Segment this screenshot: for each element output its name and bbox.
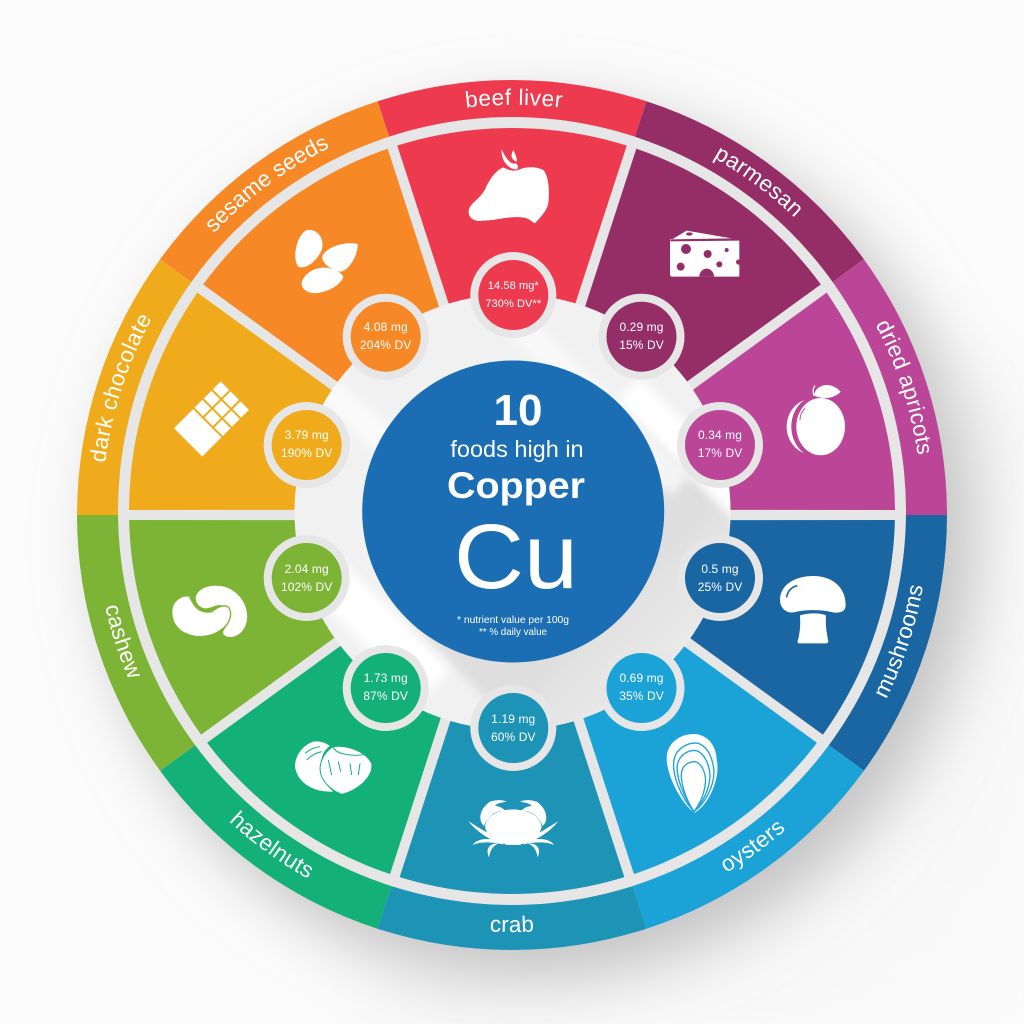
value: sesame seeds: 4.08 mg — [364, 320, 408, 334]
footnotes — [457, 614, 569, 638]
value: hazelnuts — [343, 645, 429, 731]
title number: 10 — [494, 386, 542, 435]
wedge: mushrooms — [690, 520, 895, 735]
band: sesame seeds — [148, 84, 414, 309]
wedge: dark chocolate — [129, 292, 332, 510]
value: beef liver — [470, 252, 556, 338]
value: parmesan — [598, 294, 684, 380]
label: crab: crab — [490, 916, 533, 932]
icon: mushroom — [780, 576, 846, 643]
value: crab: 60% DV — [491, 730, 536, 744]
value: cashew: 102% DV — [281, 580, 332, 594]
value: dried apricots — [677, 402, 763, 488]
wedge: hazelnuts — [207, 646, 441, 874]
value: dried apricots: 17% DV — [698, 446, 742, 460]
inner disc with long shadows — [294, 298, 730, 726]
band: parmesan — [610, 84, 876, 309]
soft shadow of wheel — [100, 104, 972, 976]
band: mushrooms — [805, 496, 967, 777]
band: oysters — [610, 721, 876, 946]
ring base — [118, 117, 906, 905]
long shadow of wheel — [204, 207, 1024, 1024]
icon: crab — [468, 800, 558, 857]
value: beef liver: 730% DV** — [485, 298, 542, 310]
footnotes: ** % daily value — [479, 626, 547, 638]
wedge: beef liver — [397, 128, 627, 304]
panel: outer band sectors — [57, 80, 967, 950]
title element name: Copper — [447, 465, 585, 506]
label: dark chocolate: dark chocolate — [90, 315, 150, 462]
label: oysters: oysters — [722, 822, 784, 871]
value: dark chocolate — [264, 402, 350, 488]
band: crab — [378, 867, 646, 950]
value: hazelnuts: 1.73 mg — [364, 671, 408, 685]
wedge: oysters — [583, 646, 817, 874]
label: mushrooms: mushrooms — [876, 585, 922, 698]
value: crab: 1.19 mg — [491, 712, 535, 726]
icon: sesame seeds — [295, 230, 358, 293]
band: dried apricots — [805, 253, 967, 534]
icon: cow — [469, 149, 549, 223]
centre circle: title — [362, 360, 664, 662]
value: parmesan: 0.29 mg — [619, 320, 664, 334]
value: cashew — [264, 535, 350, 621]
footnotes: * nutrient value per 100g — [457, 614, 569, 626]
value: mushrooms: 25% DV — [698, 580, 742, 594]
wedge: dried apricots — [693, 292, 895, 510]
value: oysters: 0.69 mg — [619, 671, 664, 685]
value: mushrooms: 0.5 mg — [701, 562, 739, 576]
value: beef liver: 14.58 mg* — [488, 280, 539, 292]
value: parmesan: 15% DV — [619, 338, 664, 352]
value: dark chocolate: 190% DV — [281, 446, 332, 460]
value: dried apricots: 0.34 mg — [698, 428, 742, 442]
wedge: parmesan — [585, 148, 821, 382]
value: oysters: 35% DV — [619, 689, 664, 703]
value: dark chocolate: 3.79 mg — [285, 428, 329, 442]
icon: hazelnuts — [295, 741, 372, 794]
band: cashew — [57, 496, 219, 777]
title line: foods high in — [450, 436, 584, 462]
band: hazelnuts — [148, 721, 414, 946]
icon: cashew — [172, 586, 247, 637]
label: parmesan: parmesan — [712, 148, 801, 217]
panel: inner wedges — [129, 128, 895, 894]
value: oysters — [598, 645, 684, 731]
value: sesame seeds — [343, 294, 429, 380]
element symbol: Cu — [454, 506, 578, 608]
value: sesame seeds: 204% DV — [360, 338, 411, 352]
band: beef liver — [378, 80, 646, 163]
icon: oyster — [667, 734, 717, 813]
wedge: crab — [400, 721, 624, 894]
wedge: sesame seeds — [203, 148, 439, 382]
icon: apricot — [787, 385, 845, 457]
label: cashew: cashew — [106, 606, 140, 677]
icon: chocolate bar — [174, 382, 249, 456]
label: dried apricots: dried apricots — [876, 321, 930, 454]
value: hazelnuts: 87% DV — [363, 689, 408, 703]
value: crab — [470, 685, 556, 771]
label: sesame seeds: sesame seeds — [207, 138, 328, 232]
band: dark chocolate — [57, 253, 219, 534]
wedge: cashew — [129, 520, 334, 735]
label: hazelnuts: hazelnuts — [230, 810, 312, 878]
label: beef liver: beef liver — [466, 88, 562, 108]
value: cashew: 2.04 mg — [285, 562, 329, 576]
value: mushrooms — [677, 535, 763, 621]
icon: cheese — [670, 231, 741, 277]
